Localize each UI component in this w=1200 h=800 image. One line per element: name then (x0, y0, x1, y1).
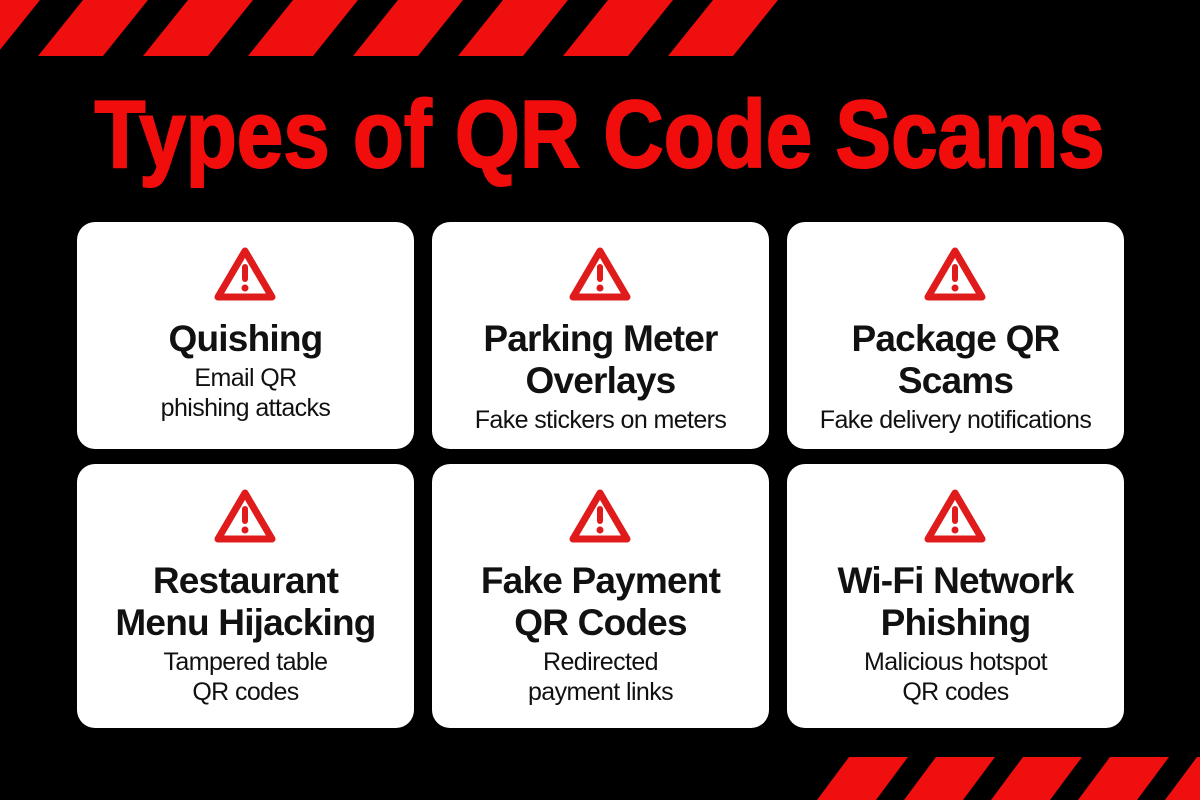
card: Quishing (77, 222, 414, 449)
icon: warning (924, 248, 986, 300)
bottom hazard stripes (817, 757, 1200, 800)
card: Parking Meter Overlays: Overlays (526, 360, 675, 401)
card: Quishing: Email QR (194, 364, 297, 392)
card: Fake Payment QR Codes: Fake Payment (481, 560, 720, 601)
card: Restaurant Menu Hijacking: Tampered table (164, 648, 327, 676)
card: Fake Payment QR Codes: Redirected (543, 648, 658, 676)
card: Package QR Scams: Fake delivery notifications (820, 406, 1091, 434)
icon: warning (214, 248, 276, 300)
card: Wi-Fi Network Phishing: Phishing (881, 602, 1030, 643)
icon: warning (570, 490, 630, 542)
card: Quishing: phishing attacks (161, 394, 330, 422)
card: Fake Payment QR Codes: QR Codes (514, 602, 687, 643)
card: Parking Meter Overlays: Parking Meter (483, 318, 718, 359)
card: Wi-Fi Network Phishing (787, 464, 1124, 728)
card: Package QR Scams (787, 222, 1124, 449)
card: Restaurant Menu Hijacking (77, 464, 414, 728)
card: Wi-Fi Network Phishing: Wi-Fi Network (838, 560, 1073, 601)
icon: warning (214, 490, 276, 542)
card: Parking Meter Overlays: Fake stickers on meters (475, 406, 726, 434)
card: Restaurant Menu Hijacking: QR codes (192, 678, 299, 706)
card: Fake Payment QR Codes (432, 464, 769, 728)
card: Restaurant Menu Hijacking: Menu Hijacking (115, 602, 376, 643)
title: Types of QR Code Scams (95, 81, 1105, 188)
card: Wi-Fi Network Phishing: Malicious hotspot (864, 648, 1047, 676)
card: Package QR Scams: Package QR (852, 318, 1059, 359)
top hazard stripes (0, 0, 778, 56)
icon: warning (570, 248, 630, 300)
icon: warning (924, 490, 986, 542)
card: Quishing: Quishing (169, 318, 322, 359)
card: Restaurant Menu Hijacking: Restaurant (153, 560, 338, 601)
card: Fake Payment QR Codes: payment links (528, 678, 673, 706)
card: Parking Meter Overlays (432, 222, 769, 449)
card: Wi-Fi Network Phishing: QR codes (902, 678, 1009, 706)
card: Package QR Scams: Scams (898, 360, 1013, 401)
